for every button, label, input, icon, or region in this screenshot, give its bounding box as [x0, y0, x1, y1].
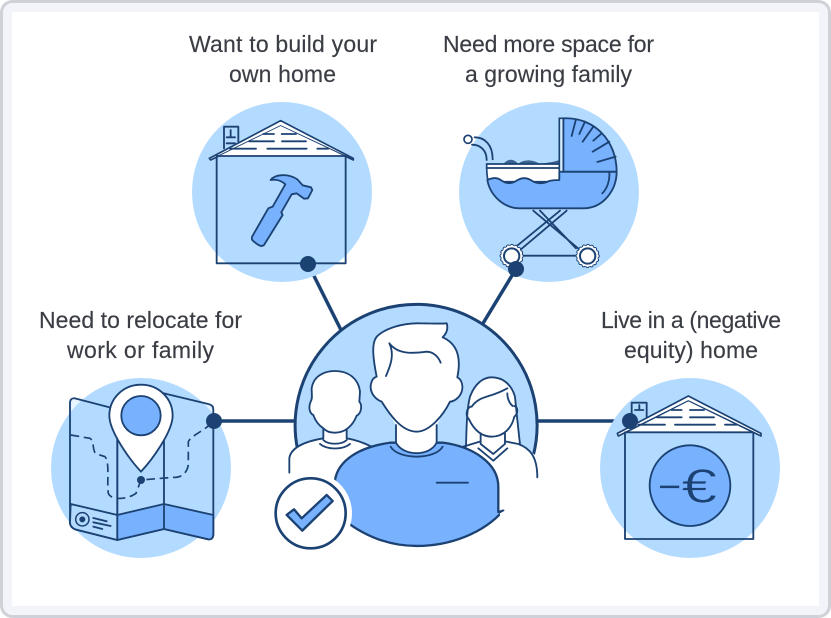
heading: negative equity: Live in a (negative: [601, 307, 781, 333]
icon: baby stroller: [459, 102, 639, 282]
legend: [76, 513, 89, 526]
euro text: −: [658, 461, 682, 513]
right panels: [117, 393, 213, 540]
man shirt: [335, 443, 503, 546]
heading: relocate: [39, 307, 242, 363]
right person: [463, 377, 537, 477]
left person: [289, 371, 377, 480]
connector lines: [214, 264, 630, 421]
frame legs: [516, 211, 580, 256]
man head: [372, 323, 463, 453]
heading: relocate: work or family: [66, 337, 214, 363]
heading: want to build: Want to build your: [189, 31, 377, 57]
heading: more space: [443, 31, 654, 87]
heading: want to build: own home: [229, 61, 336, 87]
check badge: [269, 472, 352, 555]
route: [71, 422, 213, 498]
euro text: €: [681, 460, 717, 514]
map bands: [70, 504, 117, 540]
heading: negative equity: equity) home: [624, 337, 758, 363]
basket white: [487, 164, 559, 182]
connector dots: [206, 256, 638, 429]
heading: negative equity: [601, 307, 781, 363]
central family illustration: [269, 304, 537, 555]
heading: more space: a growing family: [465, 61, 632, 87]
pocket: [437, 480, 468, 485]
hood: [563, 118, 617, 172]
left panel: [70, 398, 117, 540]
icon: house with hammer: [192, 102, 372, 282]
basket blue: [487, 172, 617, 208]
left wheel: [501, 246, 522, 266]
heading: relocate: Need to relocate for: [39, 307, 242, 333]
heading: more space: Need more space for: [443, 31, 654, 57]
right wheel: [577, 246, 598, 266]
background circle: [295, 304, 537, 457]
pin: [109, 385, 173, 472]
icon: house with negative euro: [600, 378, 780, 558]
euro text: [658, 460, 717, 514]
icon: map with pin: [51, 378, 231, 558]
hammer: [252, 175, 312, 246]
heading: want to build: [189, 31, 377, 87]
